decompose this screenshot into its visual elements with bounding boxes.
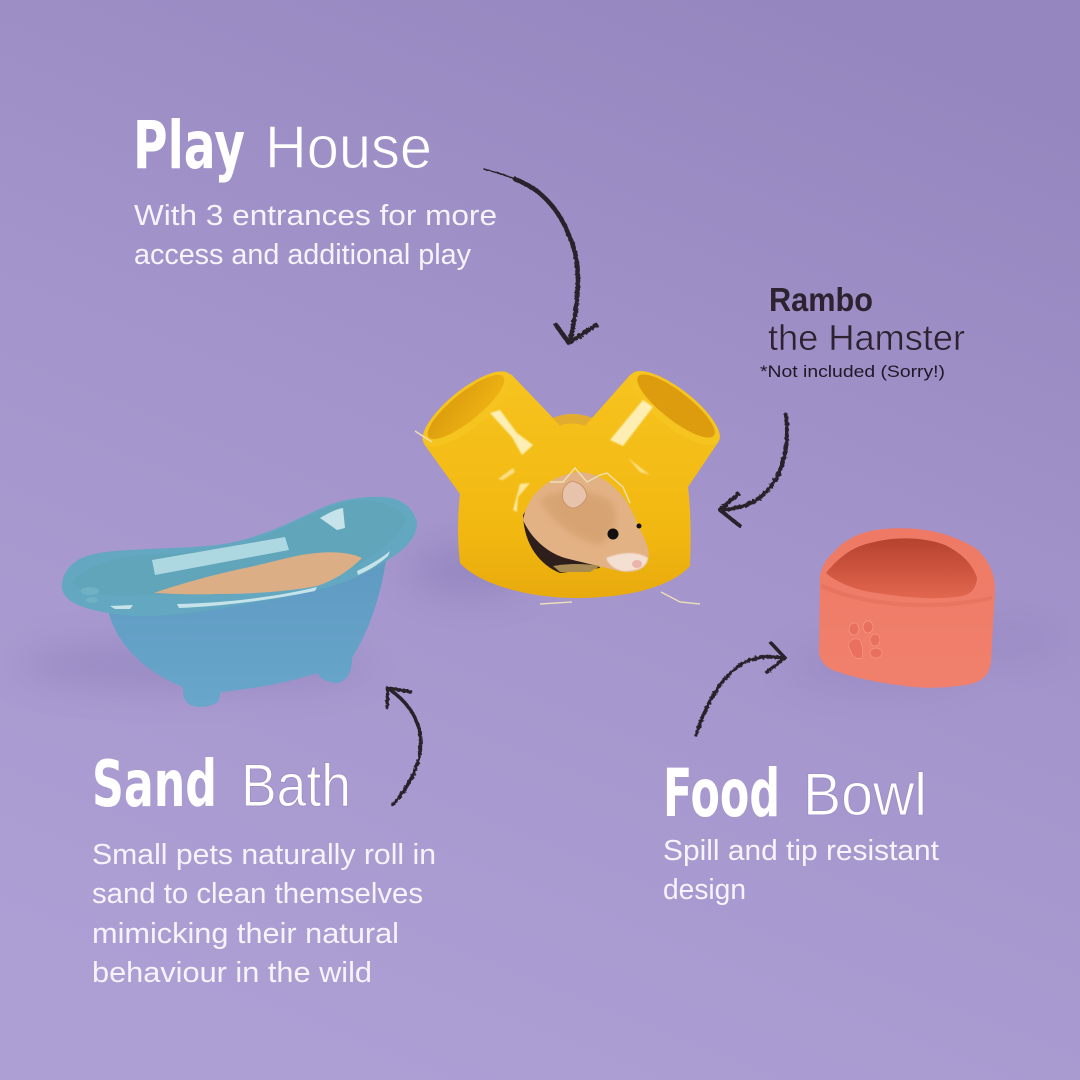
tub body with feet	[108, 560, 386, 707]
heading: Food Bowl	[663, 755, 927, 832]
left tube opening	[420, 366, 512, 448]
entrance hole shadow	[523, 490, 600, 573]
text: Sand Bath description: sand to clean themselves	[92, 878, 423, 910]
heading: Play House: House	[265, 114, 432, 181]
bowl outer wall	[819, 528, 995, 688]
text: Food Bowl description: Spill and tip resistant	[663, 835, 939, 867]
label: Rambo the Hamster	[760, 281, 965, 381]
text: Food Bowl description: design	[663, 874, 746, 906]
rim gloss highlights	[110, 508, 390, 609]
text: Food Bowl description	[663, 835, 939, 906]
text: Play House description: With 3 entrances for more	[134, 200, 497, 232]
label: Rambo the Hamster: Rambo	[769, 281, 873, 318]
heading: Play House: Play	[133, 107, 245, 184]
right tube rim	[620, 359, 730, 457]
text: Sand Bath description: mimicking their natural	[92, 918, 399, 950]
heading: Sand Bath: Sand	[92, 748, 217, 822]
text: Sand Bath description	[92, 839, 436, 989]
label: Rambo the Hamster: *Not included (Sorry!)	[760, 362, 945, 381]
heading: Sand Bath	[92, 748, 351, 822]
left tube rim	[412, 360, 522, 458]
product: yellow play house with hamster	[412, 359, 730, 604]
product: coral food bowl	[819, 528, 995, 688]
heading: Food Bowl: Food	[663, 755, 780, 832]
dome top	[553, 414, 592, 426]
text: Play House description	[134, 200, 497, 271]
product: blue sand bath tub	[62, 497, 417, 707]
arrow: Rambo label to hamster	[720, 415, 787, 526]
text: Sand Bath description: Small pets naturally roll in	[92, 839, 436, 871]
label: Rambo the Hamster: the Hamster	[768, 317, 965, 358]
hamster	[523, 472, 649, 572]
tub rim	[62, 497, 417, 616]
arrow: Food Bowl to bowl	[696, 643, 785, 735]
arrow: Sand Bath to tub	[387, 688, 421, 805]
straw strands	[415, 431, 700, 604]
text: Play House description: access and additional play	[134, 239, 471, 271]
heading: Sand Bath: Bath	[241, 752, 351, 819]
embossed paw print	[848, 621, 882, 658]
tub basin	[72, 500, 406, 596]
house body and tubes	[424, 374, 719, 598]
shadows beneath products	[15, 546, 1060, 685]
soap dish detail on rim	[81, 587, 99, 603]
heading: Food Bowl: Bowl	[803, 761, 927, 828]
arrow: Play House to yellow house	[484, 169, 596, 343]
right tube opening	[630, 365, 722, 447]
sand	[154, 552, 362, 594]
heading: Play House	[133, 107, 432, 184]
text: Sand Bath description: behaviour in the wild	[92, 957, 372, 989]
gloss highlights	[490, 400, 653, 512]
bowl rim shadow	[821, 583, 992, 607]
bowl inner	[826, 538, 977, 598]
